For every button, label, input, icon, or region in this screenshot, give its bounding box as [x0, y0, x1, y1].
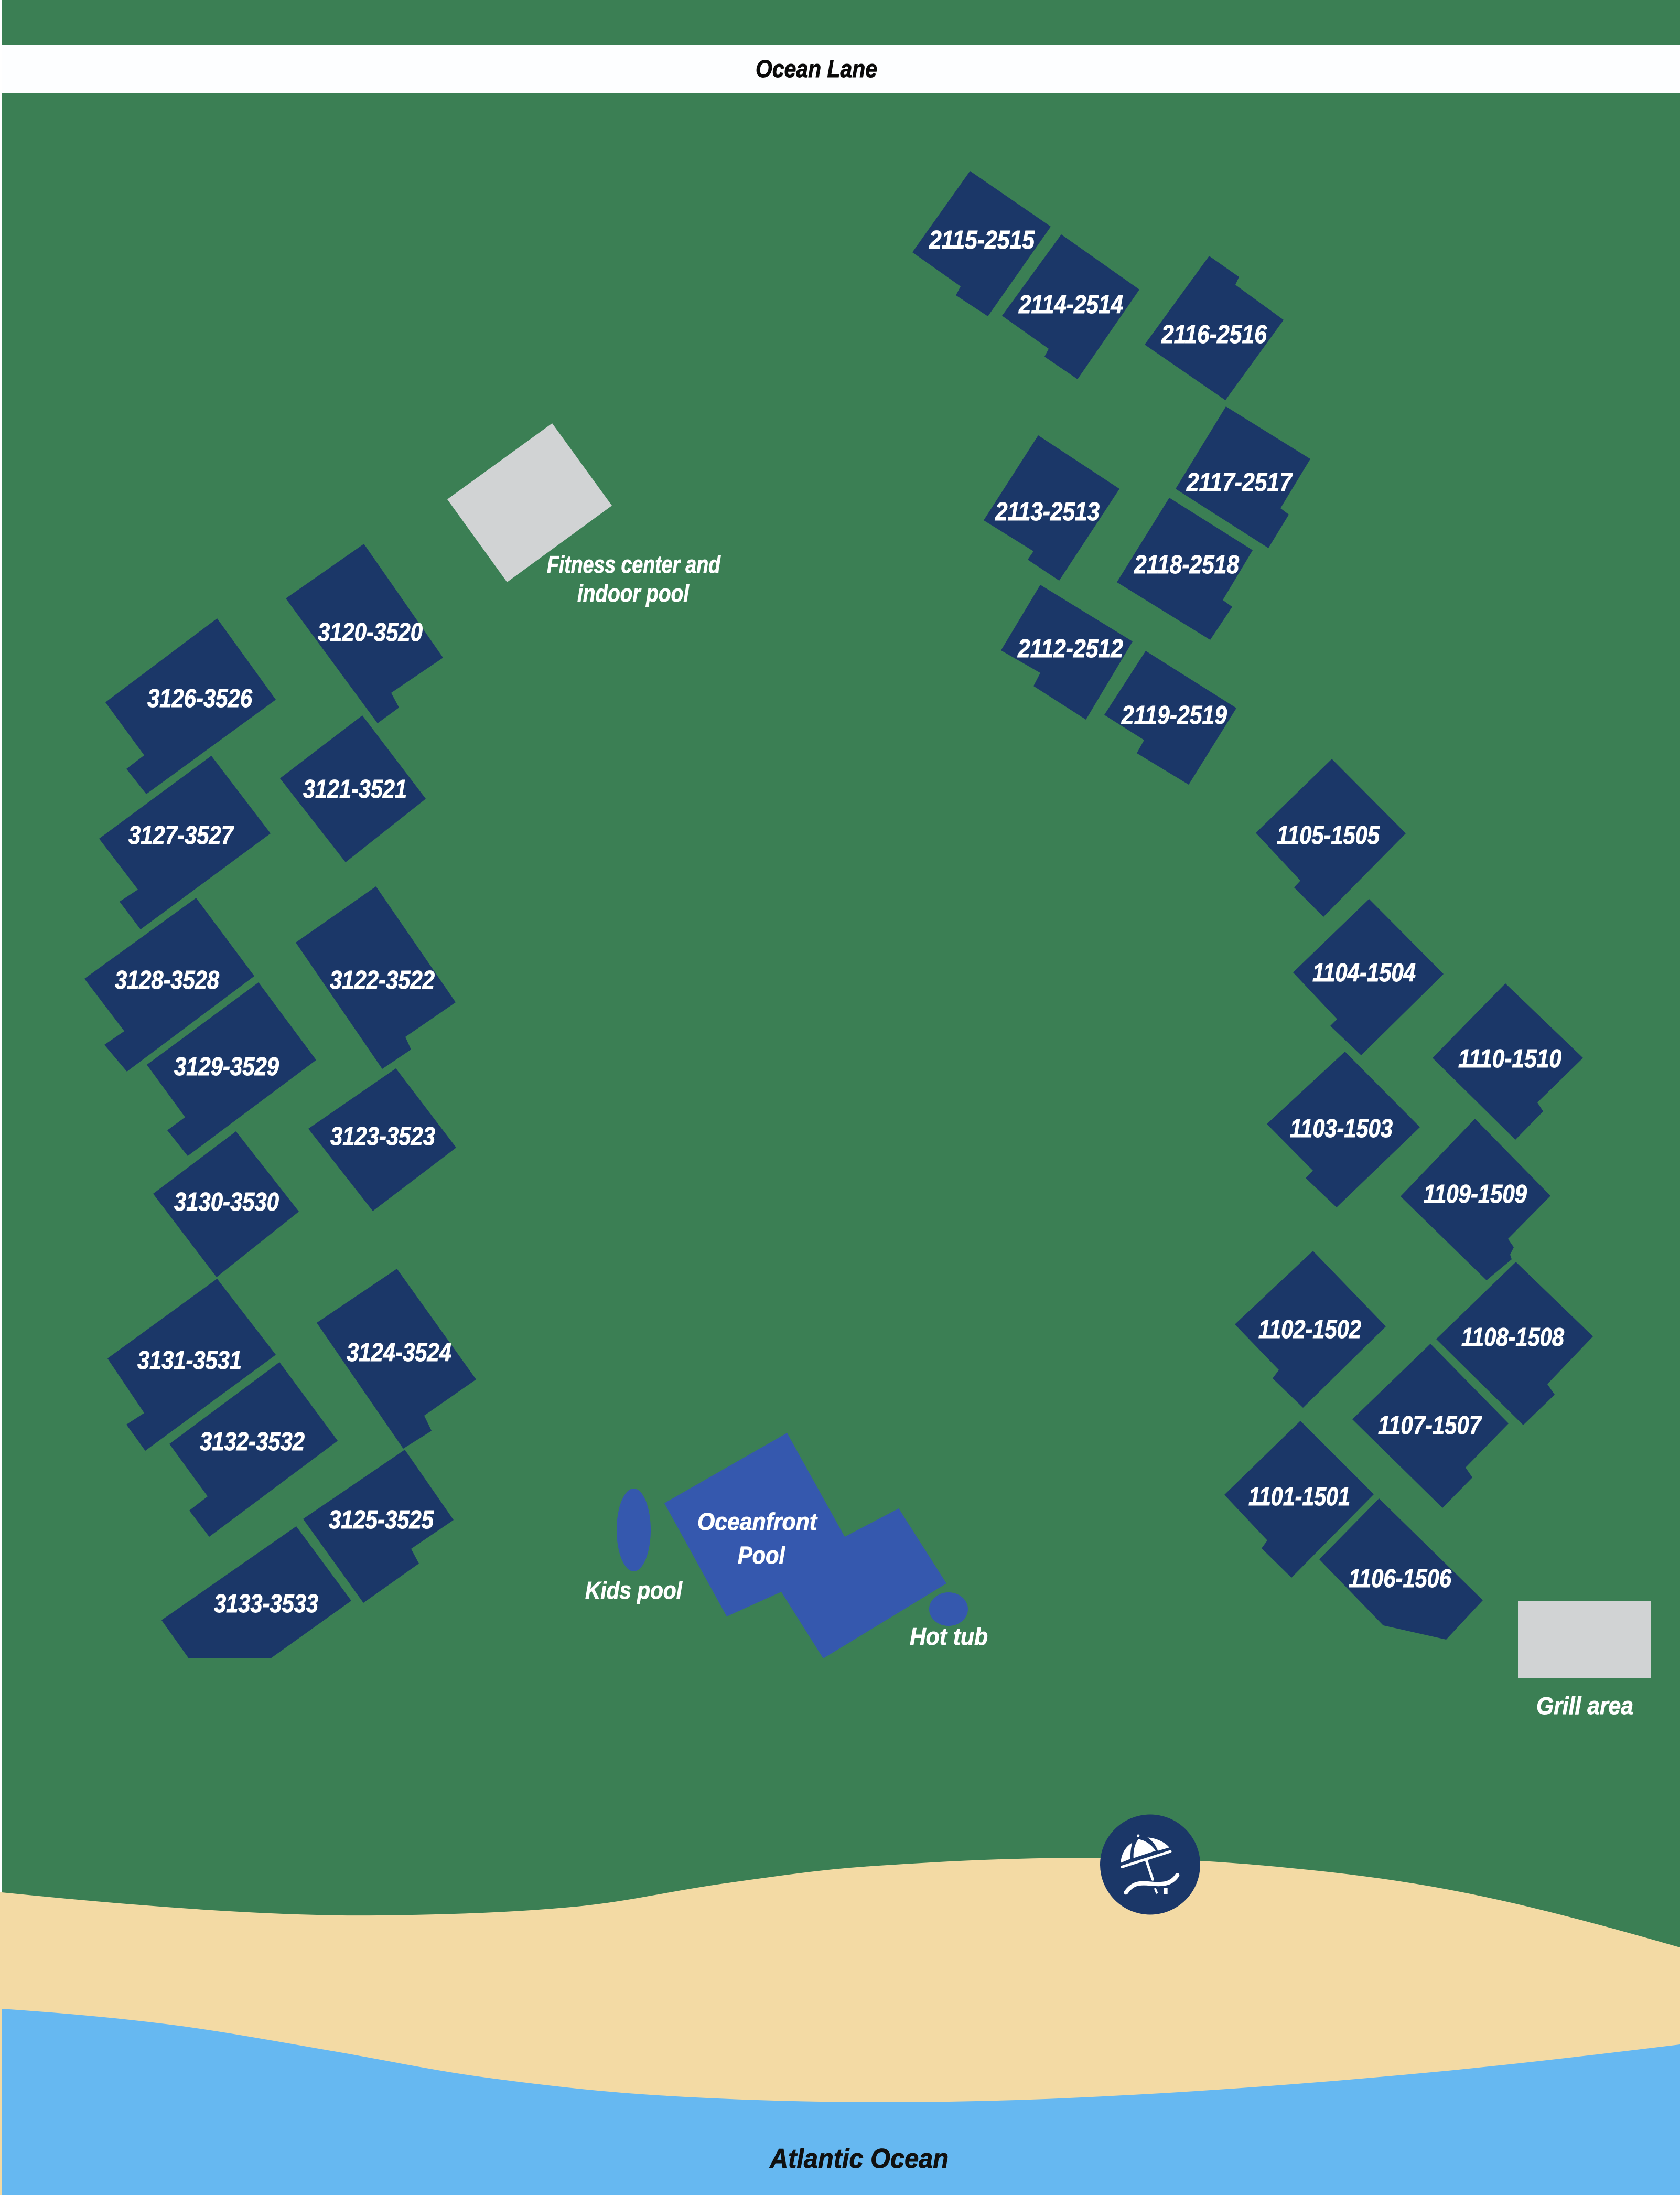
building 3129-3529	[147, 982, 316, 1156]
building 3128-3528: 3128-3528	[115, 966, 220, 994]
building 3126-3526: 3126-3526	[147, 684, 253, 713]
building 1105-1505	[1256, 759, 1406, 917]
building 3124-3524: 3124-3524	[347, 1339, 451, 1367]
hot tub: Hot tub	[910, 1623, 988, 1650]
building 1107-1507	[1352, 1344, 1509, 1508]
building 3133-3533	[161, 1526, 351, 1658]
building 3123-3523: 3123-3523	[330, 1122, 435, 1151]
building 1102-1502	[1235, 1251, 1386, 1408]
building 2118-2518	[1117, 498, 1253, 640]
building 1104-1504: 1104-1504	[1312, 959, 1416, 987]
building 2116-2516	[1145, 256, 1284, 400]
building 3132-3532: 3132-3532	[200, 1428, 305, 1456]
building 2115-2515	[912, 171, 1051, 316]
building 2118-2518: 2118-2518	[1134, 551, 1240, 579]
oceanfront pool	[664, 1433, 946, 1658]
kids pool	[585, 1489, 683, 1604]
building 1101-1501	[1224, 1421, 1374, 1578]
building 3133-3533: 3133-3533	[214, 1590, 318, 1618]
building 3122-3522: 3122-3522	[330, 966, 435, 994]
building 2117-2517	[1176, 406, 1310, 548]
building 3127-3527	[99, 756, 271, 929]
beach sand	[0, 1858, 1680, 2195]
building 3123-3523	[308, 1068, 456, 1211]
building 3120-3520	[286, 544, 443, 723]
fitness center and indoor pool: indoor pool	[577, 580, 690, 607]
oceanfront pool: Oceanfront	[697, 1508, 818, 1535]
oceanfront pool: Pool	[738, 1541, 785, 1569]
building 3127-3527: 3127-3527	[128, 821, 234, 850]
icon: beach umbrella and lounger	[1100, 1815, 1200, 1914]
building 1109-1509	[1401, 1119, 1550, 1280]
building 2112-2512	[1001, 585, 1133, 720]
building 2119-2519: 2119-2519	[1121, 701, 1227, 730]
building 3130-3530: 3130-3530	[174, 1188, 279, 1216]
hot tub	[910, 1592, 988, 1650]
building 1107-1507: 1107-1507	[1378, 1411, 1482, 1440]
building 2114-2514: 2114-2514	[1018, 291, 1123, 319]
building 3130-3530	[153, 1131, 299, 1277]
building 3128-3528	[84, 898, 254, 1072]
building 3126-3526	[105, 618, 276, 794]
building 2117-2517: 2117-2517	[1186, 468, 1293, 497]
building 1101-1501: 1101-1501	[1248, 1483, 1350, 1511]
building 1106-1506: 1106-1506	[1349, 1565, 1452, 1593]
building 3129-3529: 3129-3529	[174, 1053, 279, 1081]
building 1110-1510: 1110-1510	[1458, 1045, 1561, 1073]
Atlantic Ocean water	[2, 2009, 1680, 2195]
kids pool: Kids pool	[585, 1577, 683, 1604]
building 1108-1508: 1108-1508	[1461, 1323, 1565, 1352]
building 1110-1510	[1433, 983, 1583, 1140]
building 3131-3531: 3131-3531	[137, 1346, 242, 1375]
building 1104-1504	[1293, 899, 1444, 1055]
grill area	[1518, 1601, 1651, 1719]
building 3132-3532	[169, 1362, 338, 1537]
building 1105-1505: 1105-1505	[1277, 821, 1380, 850]
building 3121-3521	[280, 715, 426, 862]
fitness center and indoor pool: Fitness center and	[547, 551, 721, 578]
road: Ocean Lane	[2, 45, 1680, 93]
road: Ocean Lane: Ocean Lane	[756, 55, 877, 82]
building 1108-1508	[1436, 1262, 1593, 1425]
fitness center and indoor pool	[447, 423, 721, 607]
building 1109-1509: 1109-1509	[1424, 1180, 1527, 1208]
building 3121-3521: 3121-3521	[303, 775, 407, 804]
building 2114-2514	[1002, 234, 1139, 379]
building 3125-3525: 3125-3525	[329, 1506, 434, 1534]
building 2113-2513: 2113-2513	[995, 498, 1100, 526]
building 2115-2515: 2115-2515	[929, 226, 1035, 254]
Atlantic Ocean water: Atlantic Ocean	[769, 2144, 949, 2174]
building 1106-1506	[1319, 1498, 1483, 1640]
building 2112-2512: 2112-2512	[1017, 635, 1123, 663]
building 1102-1502: 1102-1502	[1258, 1315, 1361, 1344]
building 3125-3525	[303, 1450, 454, 1603]
building 1103-1503: 1103-1503	[1290, 1115, 1393, 1143]
building 1103-1503	[1267, 1052, 1420, 1207]
building 3122-3522	[296, 886, 456, 1069]
building 2116-2516: 2116-2516	[1161, 320, 1267, 349]
building 3120-3520: 3120-3520	[318, 618, 423, 647]
building 3124-3524	[317, 1269, 476, 1449]
building 2113-2513	[984, 435, 1119, 581]
building 2119-2519	[1104, 651, 1236, 785]
grill area: Grill area	[1536, 1692, 1633, 1719]
building 3131-3531	[107, 1279, 276, 1451]
